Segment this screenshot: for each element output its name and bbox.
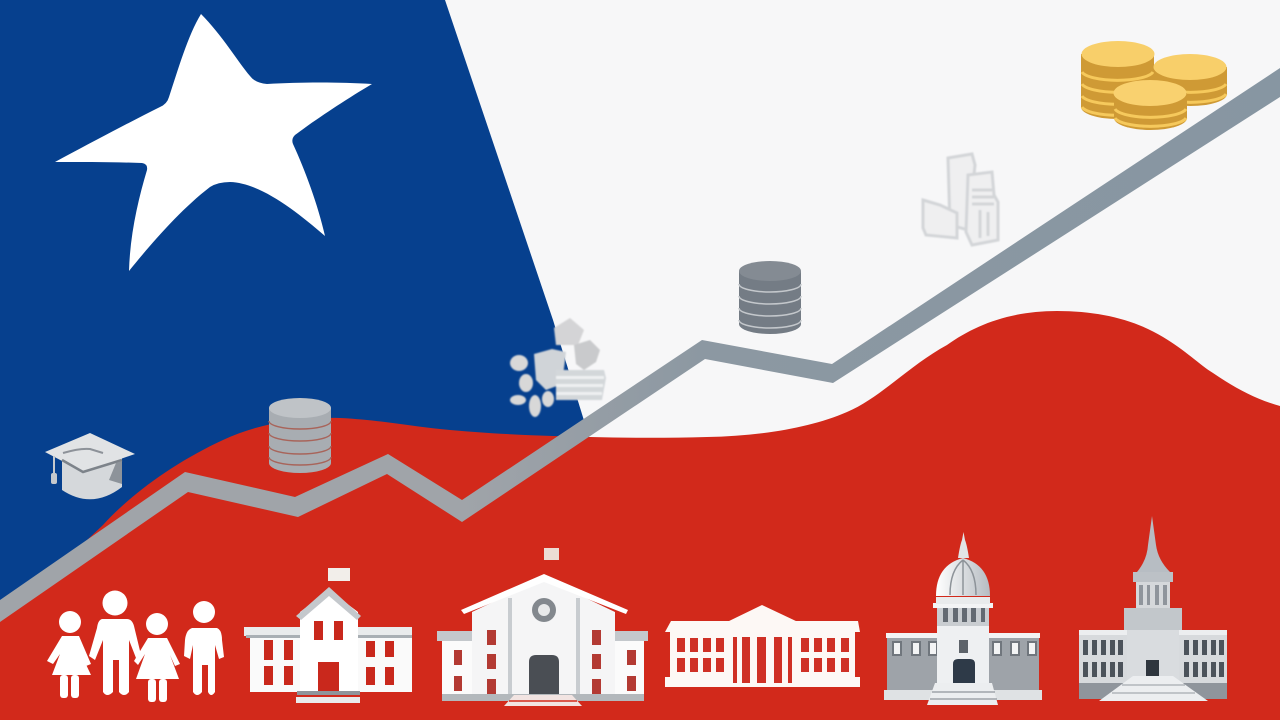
icon: gold coins [1081,41,1227,130]
building: small school [244,568,412,703]
flag white star [55,14,372,271]
coin stack front [1114,80,1187,130]
coin stack right [1154,54,1227,106]
girl left [47,611,91,698]
icon: grey data stack left [269,398,331,473]
rising trend line [0,68,1280,622]
building: white colonnaded hall [665,605,860,687]
coin stack left [1081,41,1154,119]
icon: faded buildings outline [923,154,998,245]
icon: faded rocks and crate [510,318,606,417]
girl right [134,613,180,702]
flag blue field [0,0,590,625]
building: spired capitol [1079,516,1227,701]
man [89,590,141,695]
boy [184,601,224,695]
icon: graduation cap [45,433,135,499]
building: large school [437,548,648,706]
icon: grey data stack centre [739,261,801,334]
building: domed capitol [884,532,1042,705]
flag red wave [0,311,1280,720]
icon: family of four [47,590,224,702]
